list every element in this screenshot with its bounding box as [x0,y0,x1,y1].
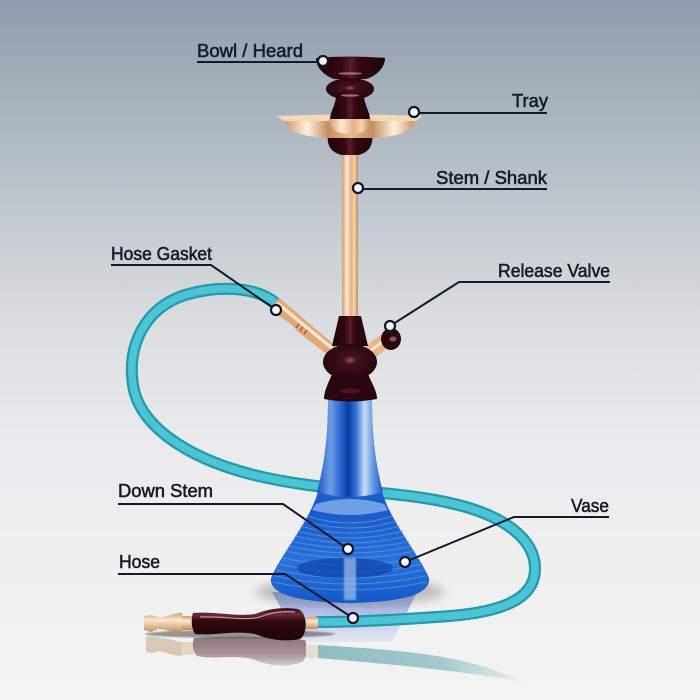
vase body [271,400,429,603]
tray [276,114,423,138]
label: Hose Gasket: Hose Gasket [111,243,212,264]
leader lines [111,62,610,618]
release valve arm and knob [366,328,401,359]
label: Down Stem: Down Stem [118,480,213,501]
label: Release Valve: Release Valve [498,260,610,281]
tray centre cup [329,119,371,134]
label: Tray: Tray [512,90,549,111]
hose handle [144,608,318,640]
wooden grip [192,608,306,640]
markers [271,56,419,623]
label: Vase: Vase [571,495,609,516]
handle shadow [145,630,335,638]
middle bulge [326,78,374,100]
upper wooden stack [316,56,385,120]
lower wooden joint [323,316,377,402]
stem [342,153,358,318]
vase rings [273,516,427,590]
mouthpiece [144,613,182,633]
vase [271,400,429,603]
label: Hose: Hose [119,551,160,572]
label: Stem / Shank: Stem / Shank [436,167,548,188]
floor shadow [255,579,445,605]
hose [132,289,535,622]
tray lower bulge [328,133,372,155]
hose gasket arm [270,298,336,356]
bowl [316,56,385,79]
label: Bowl / Heard: Bowl / Heard [197,40,303,61]
lower cone [330,97,370,120]
reflection on floor [146,592,523,682]
